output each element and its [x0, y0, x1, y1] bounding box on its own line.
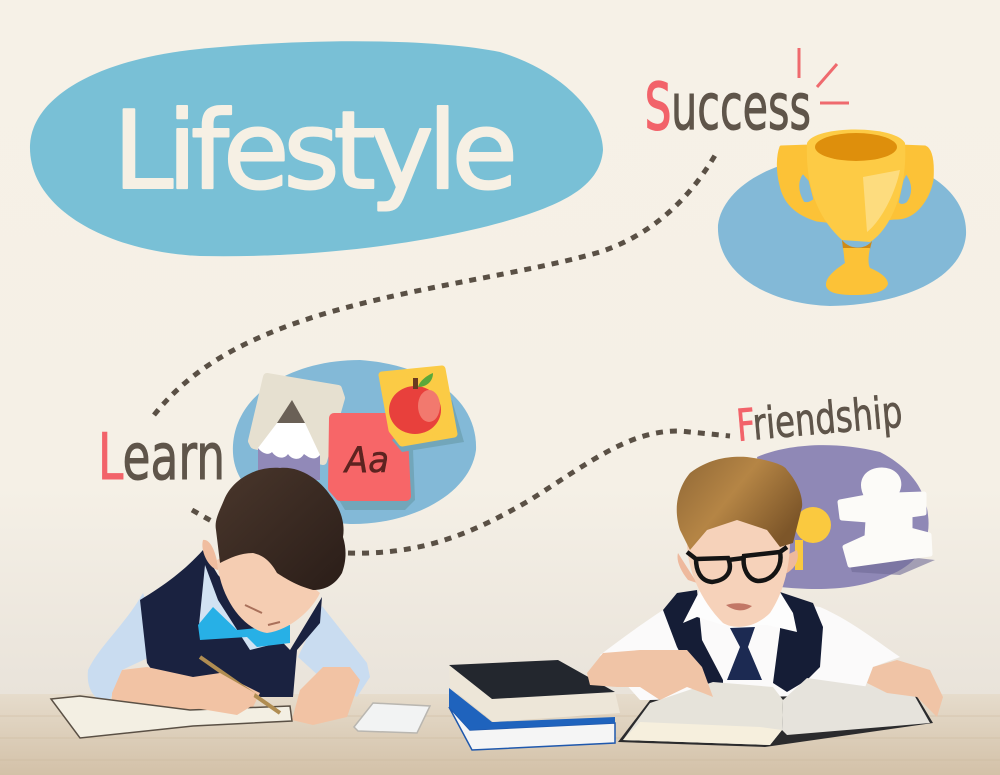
icon: Aa card — [333, 418, 415, 510]
icon: white puzzle piece — [840, 470, 935, 575]
dashed path: learn to friendship — [192, 431, 730, 553]
photo: left boy — [88, 468, 370, 725]
notebook left — [51, 696, 292, 738]
closed eye and mouth — [245, 605, 280, 625]
right hand — [292, 667, 360, 725]
panel: friendship icon — [757, 445, 935, 589]
panel: success icon — [718, 130, 966, 306]
hand over pencil — [193, 673, 255, 715]
blob behind icons — [233, 360, 476, 524]
ears — [677, 550, 798, 583]
table — [0, 694, 1000, 775]
shirt sleeves — [88, 593, 165, 705]
collar — [683, 590, 797, 632]
icon: Aa card: Aa — [343, 440, 389, 481]
blob behind trophy — [718, 155, 966, 306]
vest — [140, 550, 322, 697]
shirt front — [199, 565, 290, 650]
arms of right boy — [587, 650, 943, 717]
tie — [727, 627, 762, 680]
left arm — [112, 667, 260, 715]
blob behind puzzle — [757, 445, 929, 589]
phone — [354, 703, 430, 733]
open book — [618, 678, 933, 747]
vest — [663, 590, 723, 695]
pencil — [200, 657, 280, 713]
title: Lifestyle — [113, 89, 518, 214]
icon: yellow puzzle piece — [795, 507, 831, 570]
bow tie — [198, 607, 290, 647]
lips — [726, 603, 752, 610]
hair — [216, 468, 346, 590]
icon: trophy — [778, 130, 932, 295]
ear — [202, 540, 218, 570]
label: success: Success — [645, 71, 811, 145]
icon: apple card — [382, 369, 464, 452]
label: friendship: Friendship — [735, 387, 904, 452]
panel: learn icons — [233, 360, 476, 524]
shirt — [600, 600, 900, 700]
dashed path: learn to success — [154, 152, 717, 415]
face — [687, 505, 790, 627]
face — [217, 545, 320, 633]
label: learn: Learn — [98, 421, 225, 495]
icon: pencil card — [252, 377, 341, 461]
hair — [677, 457, 802, 550]
icon: pencil — [258, 400, 320, 480]
photo: right boy — [600, 457, 900, 700]
panel: lifestyle title blob — [30, 41, 603, 256]
glasses — [687, 547, 787, 582]
stacked books — [449, 660, 620, 750]
icon: success sparks — [799, 48, 849, 103]
